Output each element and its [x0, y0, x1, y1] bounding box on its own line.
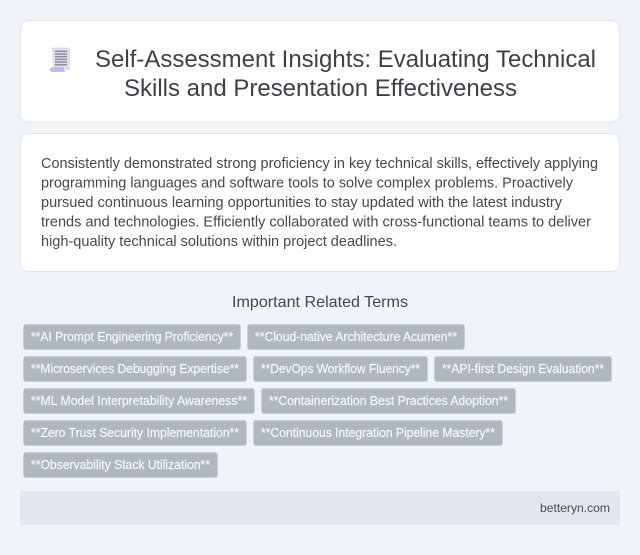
- icon: document scroll: [50, 47, 70, 72]
- tag: [262, 388, 516, 414]
- footer site name: betteryn.com: [540, 501, 610, 515]
- title: Self-Assessment Insights: Evaluating Technical: [95, 46, 596, 73]
- panel: summary card: [20, 134, 620, 272]
- panel: title card: [20, 20, 620, 122]
- tag: [24, 388, 254, 414]
- tag list: [24, 324, 612, 478]
- title: [95, 46, 596, 102]
- tag: **Zero Trust Security Implementation**: [31, 426, 239, 440]
- tag: [254, 356, 428, 382]
- title: Skills and Presentation Effectiveness: [124, 75, 517, 102]
- tag: **Observability Stack Utilization**: [31, 458, 210, 472]
- tag: [24, 452, 218, 478]
- tag: [24, 324, 240, 350]
- tag: [254, 420, 502, 446]
- tag: [24, 420, 246, 446]
- summary text: trends and technologies. Efficiently collaborated with cross-functional teams to deliver: [41, 214, 591, 230]
- tag: **Containerization Best Practices Adoption**: [269, 394, 508, 408]
- summary text: [41, 156, 598, 250]
- summary text: programming languages and software tools to solve complex problems. Proactively: [41, 176, 574, 192]
- tag: **ML Model Interpretability Awareness**: [31, 394, 247, 408]
- tag: [24, 356, 246, 382]
- tag: [434, 356, 612, 382]
- summary text: high-quality technical solutions within project deadlines.: [41, 234, 397, 250]
- heading: related terms: Important Related Terms: [232, 294, 408, 311]
- tag: **Continuous Integration Pipeline Mastery**: [261, 426, 495, 440]
- tag: **API-first Design Evaluation**: [442, 362, 604, 376]
- tag: **AI Prompt Engineering Proficiency**: [31, 330, 233, 344]
- footer bar: [20, 491, 620, 525]
- tag: **Microservices Debugging Expertise**: [31, 362, 239, 376]
- tag: [248, 324, 464, 350]
- tag: **DevOps Workflow Fluency**: [261, 362, 420, 376]
- summary text: Consistently demonstrated strong proficiency in key technical skills, effectively applying: [41, 156, 598, 172]
- summary text: pursued continuous learning opportunities to stay updated with the latest industry: [41, 195, 563, 211]
- tag: **Cloud-native Architecture Acumen**: [255, 330, 457, 344]
